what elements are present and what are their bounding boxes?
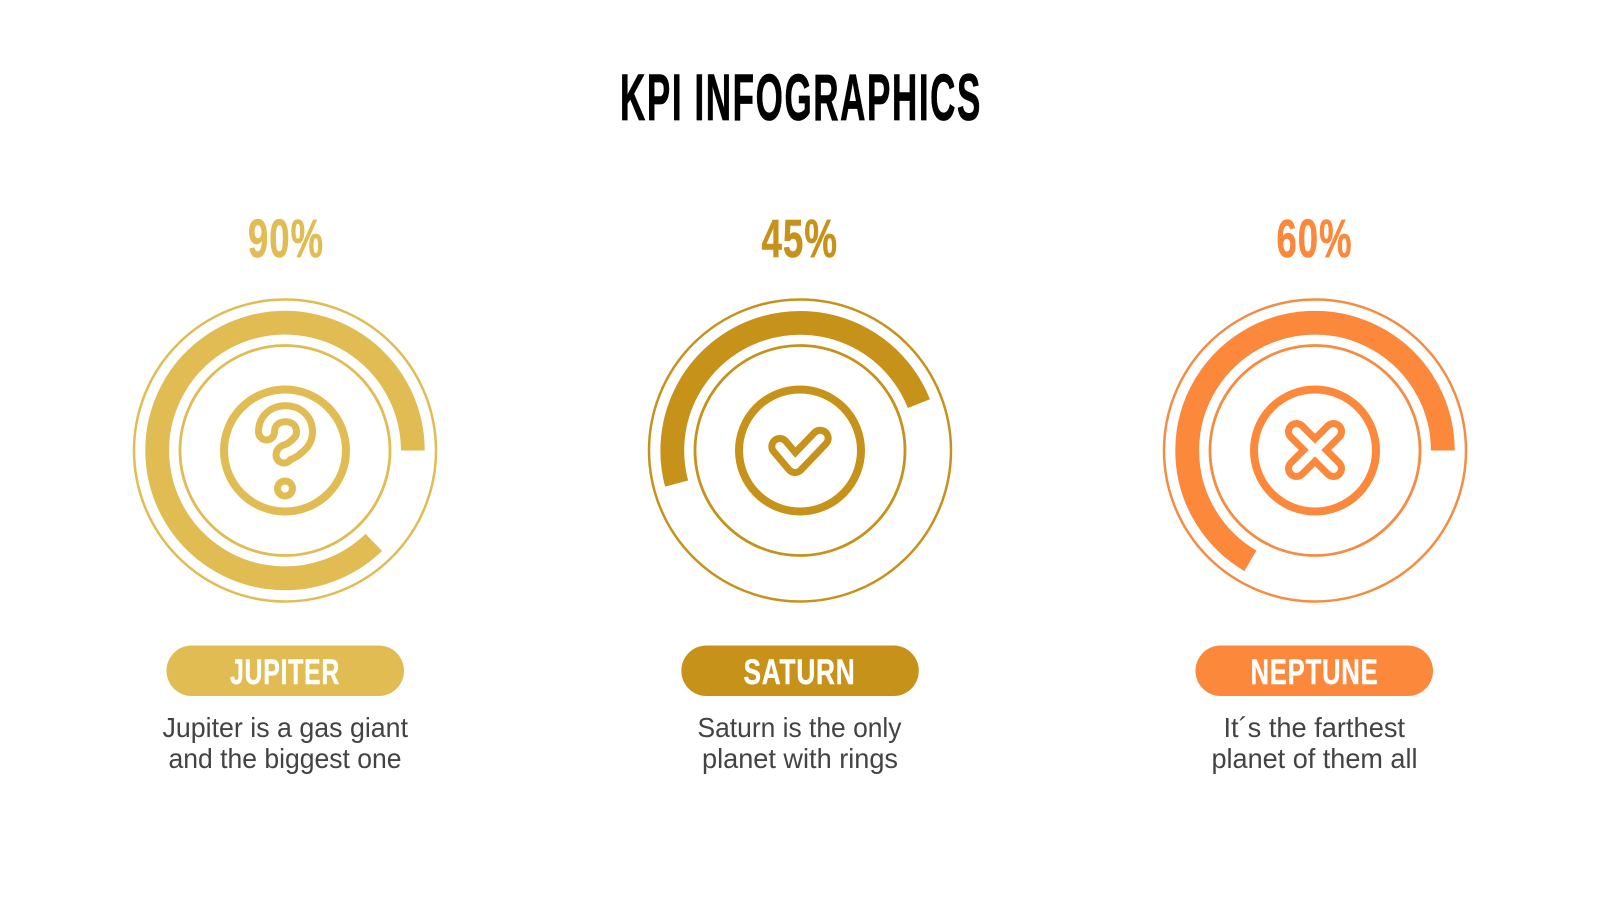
gauge: Saturn rings (649, 300, 951, 602)
description: Neptune: It´s the farthest (1224, 712, 1405, 743)
description: Neptune: planet of them all (1212, 743, 1418, 774)
description: Jupiter: and the biggest one (168, 743, 402, 774)
description: Neptune (1212, 712, 1418, 774)
panel: Jupiter KPI (134, 209, 436, 774)
label pill: Saturn (681, 646, 919, 696)
description: Saturn (698, 712, 902, 774)
icon: cross mark (1296, 432, 1334, 468)
description: Jupiter: Jupiter is a gas giant (162, 712, 408, 743)
gauge: Neptune rings (1164, 300, 1466, 602)
panel: Saturn KPI (649, 209, 951, 774)
description: Saturn: planet with rings (702, 743, 898, 774)
title: KPI INFOGRAPHICS (620, 60, 982, 134)
label pill: Jupiter (166, 646, 404, 696)
description: Saturn: Saturn is the only (698, 712, 902, 743)
label pill: Neptune: NEPTUNE (1250, 653, 1378, 692)
panel: Neptune KPI (1164, 209, 1466, 774)
description: Jupiter (162, 712, 408, 774)
percentage: 60%: 60% (1276, 209, 1352, 269)
icon: question mark (266, 414, 304, 496)
label pill: Jupiter: JUPITER (230, 653, 340, 692)
percentage: 45%: 45% (762, 209, 838, 269)
percentage: 90%: 90% (248, 209, 324, 269)
label pill: Saturn: SATURN (744, 653, 856, 692)
gauge: Jupiter rings (134, 300, 436, 602)
icon: check mark (780, 438, 820, 464)
label pill: Neptune (1196, 646, 1433, 696)
